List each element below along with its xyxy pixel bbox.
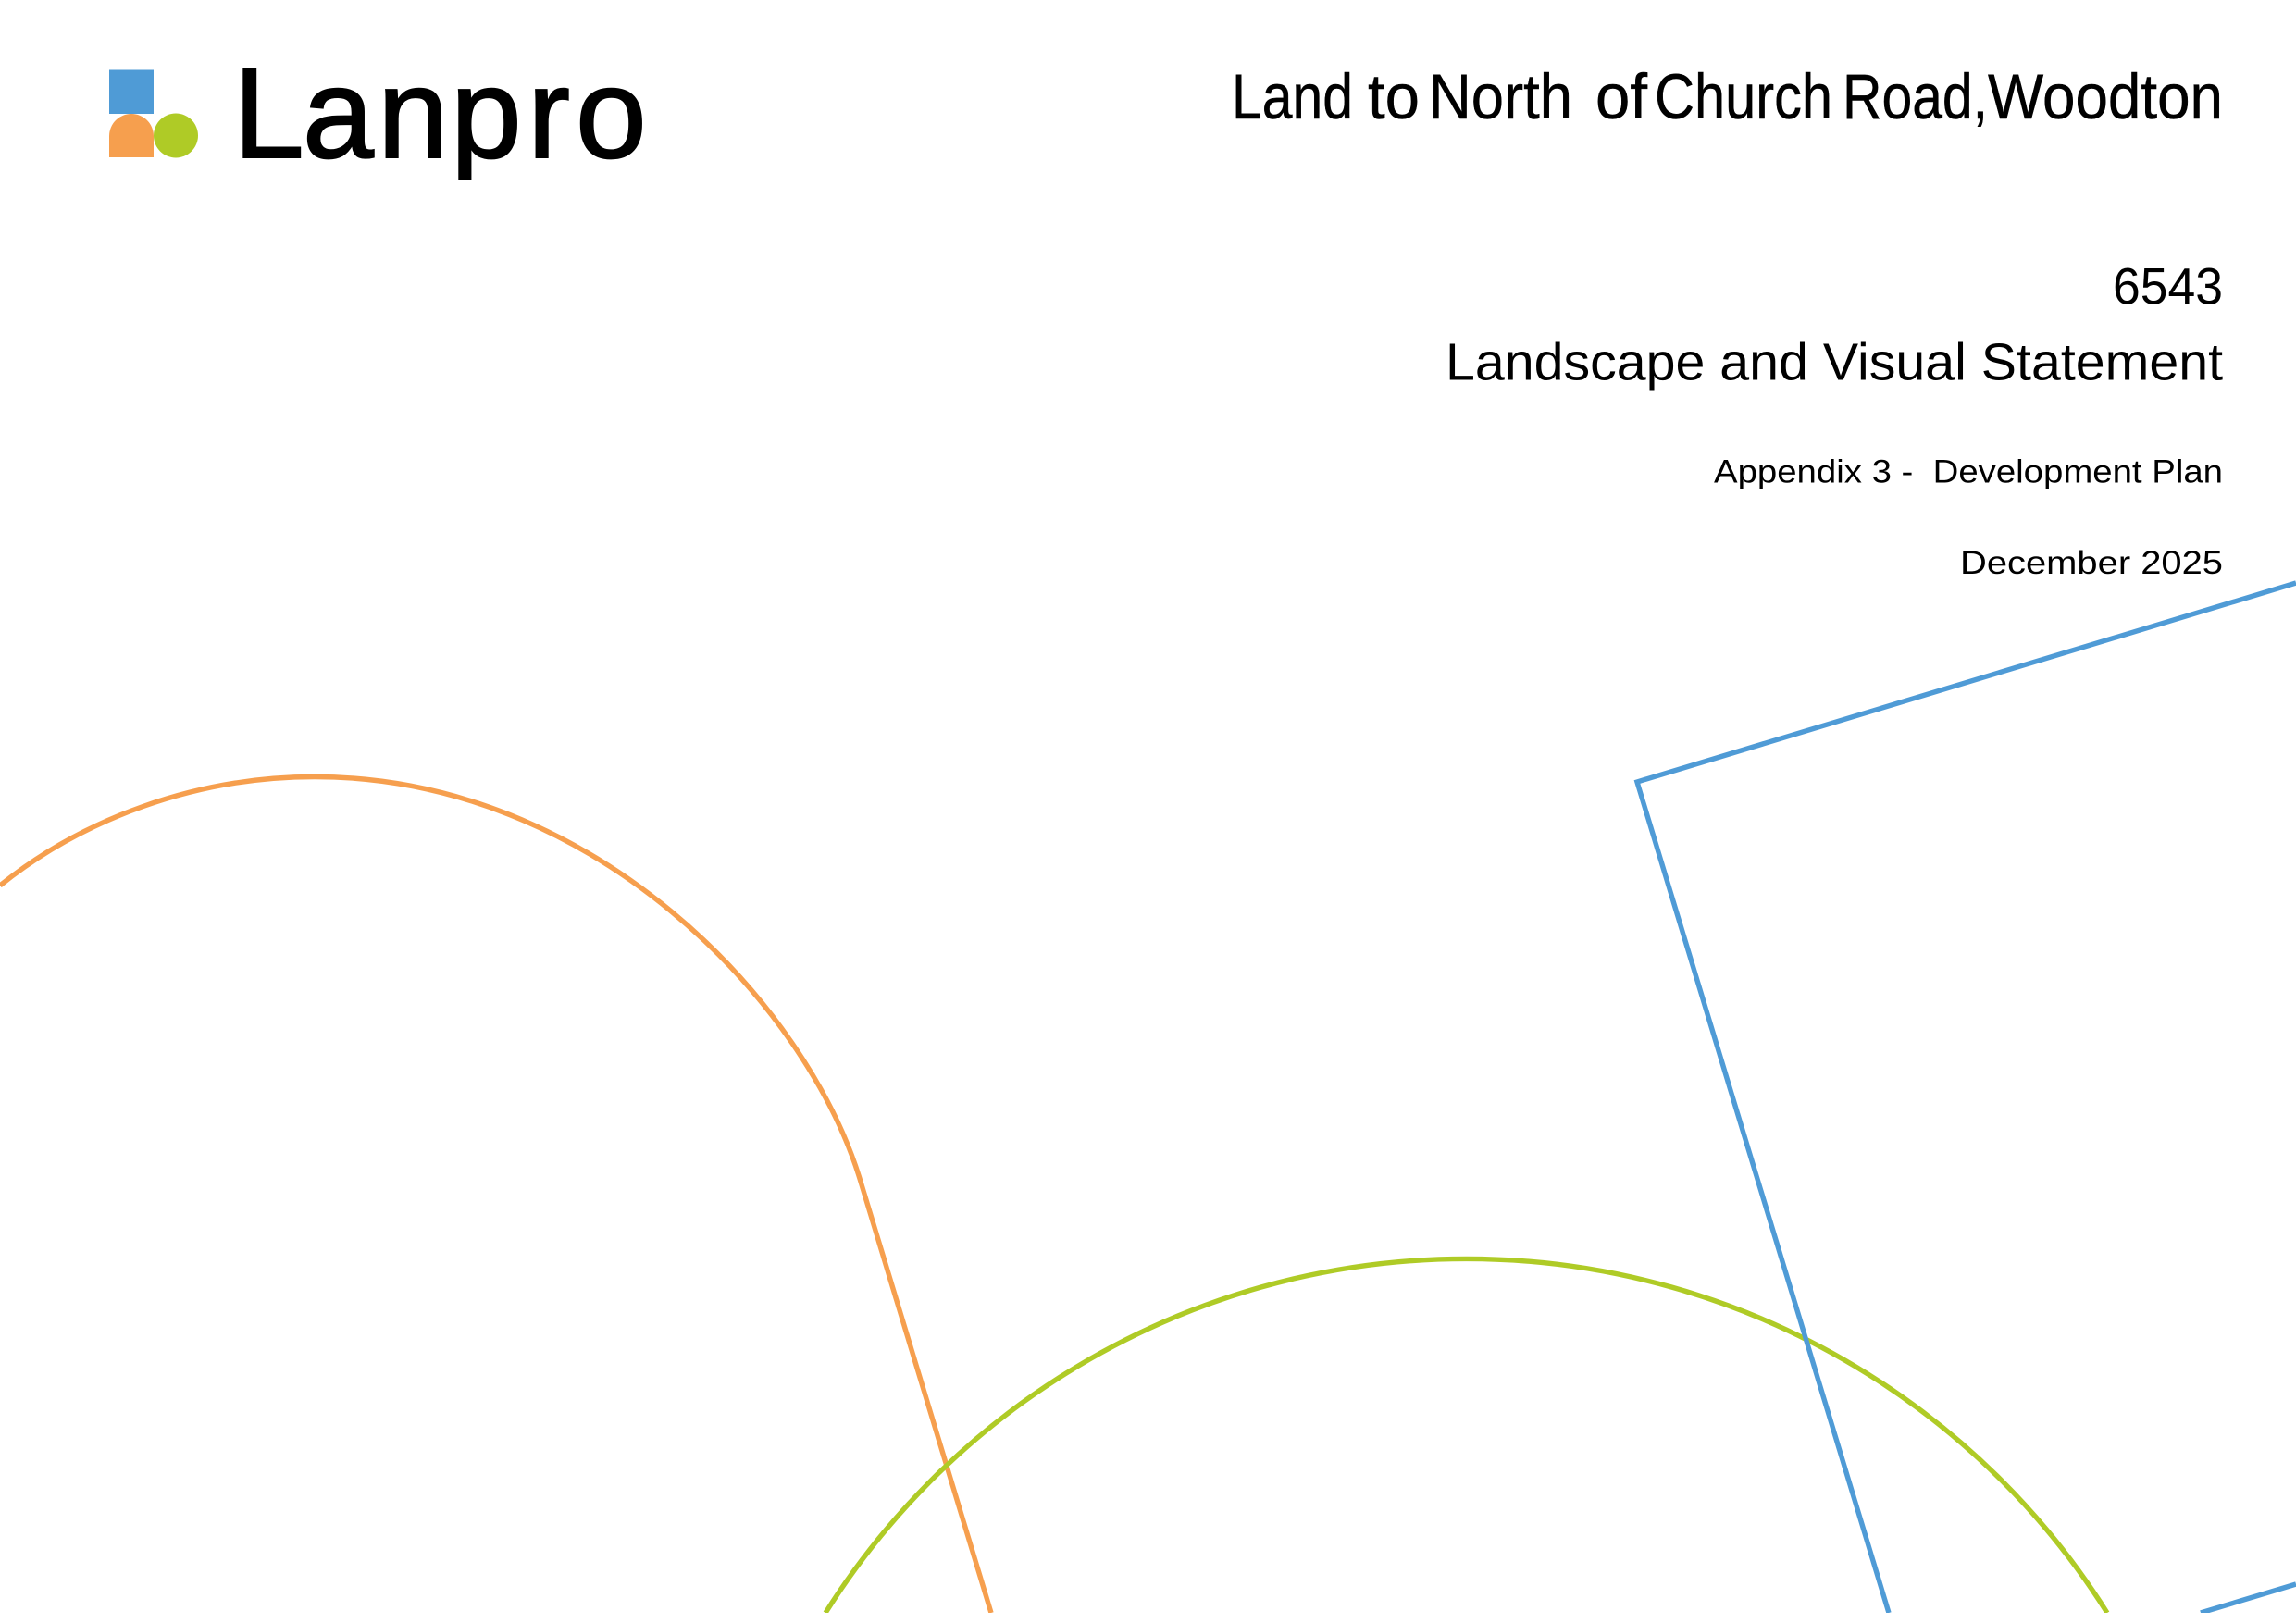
outline: green circle — [825, 1258, 2107, 1613]
icon: orange arch — [109, 114, 154, 157]
title: to — [1368, 61, 1420, 132]
date: December 2025 — [1960, 545, 2223, 581]
title: Road, — [1843, 61, 1988, 132]
outline: blue rotated square — [1637, 583, 2296, 1613]
title: North — [1429, 61, 1572, 132]
appendix label: Appendix 3 - Development Plan — [1714, 453, 2223, 490]
icon: green circle — [154, 113, 198, 157]
decorative outlines: arch, circle and rotated square — [0, 583, 2296, 1613]
outline: orange arch — [0, 777, 991, 1613]
title: Woodton — [1988, 61, 2223, 132]
title: of — [1595, 61, 1648, 132]
project number: 6543 — [2113, 257, 2223, 315]
title: Land — [1232, 61, 1353, 132]
logo: Lanpro — [109, 68, 642, 180]
document title: Landscape and Visual Statement — [1446, 333, 2223, 392]
logo wordmark: Lanpro — [233, 43, 647, 185]
title: Church — [1655, 61, 1832, 132]
icon: blue square — [109, 70, 154, 114]
